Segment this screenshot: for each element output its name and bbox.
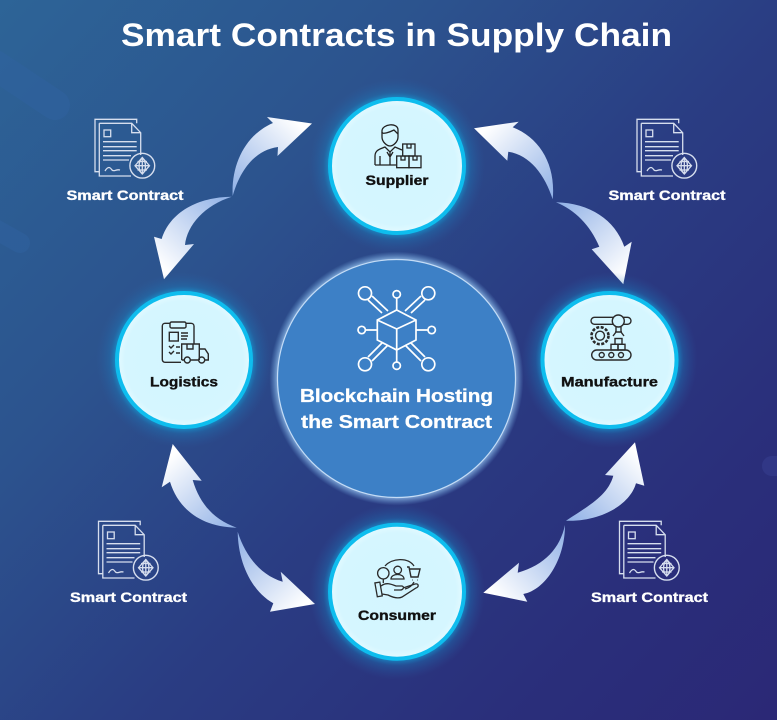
icon: contract document (637, 119, 697, 178)
arrow: supplier to logistics (154, 197, 232, 279)
arrow: logistics to consumer (238, 532, 315, 612)
icon: blockchain cube network (358, 287, 435, 371)
icon: hand with customer and cart (375, 560, 420, 598)
arrow: logistics to supplier (233, 117, 312, 196)
label: consumer: Consumer (358, 607, 437, 623)
title: Smart Contracts in Supply Chain (121, 17, 672, 53)
label: logistics: Logistics (150, 374, 218, 390)
arrow: consumer to logistics (162, 444, 237, 528)
arrow: manufacture to supplier (474, 122, 553, 199)
icon: contract document (95, 119, 155, 178)
node: consumer (309, 504, 485, 680)
icon: robotic arm and conveyor (591, 315, 631, 360)
label: smart contract: Smart Contract (66, 187, 184, 203)
smart contract: top left (66, 119, 184, 203)
smart contract: bottom right (591, 521, 708, 605)
icon: contract document (620, 521, 679, 580)
icon: clipboard and truck (162, 322, 208, 363)
icon: supplier with boxes (375, 125, 421, 168)
node: manufacture (522, 272, 698, 448)
arrow: consumer to manufacture (566, 442, 644, 521)
label: smart contract: Smart Contract (591, 589, 708, 605)
icon: contract document (98, 521, 158, 580)
label: smart contract: Smart Contract (70, 589, 187, 605)
label: supplier: Supplier (366, 172, 429, 188)
hub label: Blockchain Hosting (300, 385, 493, 406)
node: supplier (309, 78, 485, 254)
panel: blockchain hub (270, 252, 524, 506)
arrow: supplier to manufacture (556, 202, 632, 284)
node: logistics (96, 272, 272, 448)
smart contract: bottom left (70, 521, 187, 605)
smart contract: top right (608, 119, 726, 203)
arrow: manufacture to consumer (483, 525, 565, 602)
label: smart contract: Smart Contract (608, 187, 726, 203)
panel: blockchain hub: the Smart Contract (301, 411, 492, 432)
label: manufacture: Manufacture (561, 374, 658, 390)
